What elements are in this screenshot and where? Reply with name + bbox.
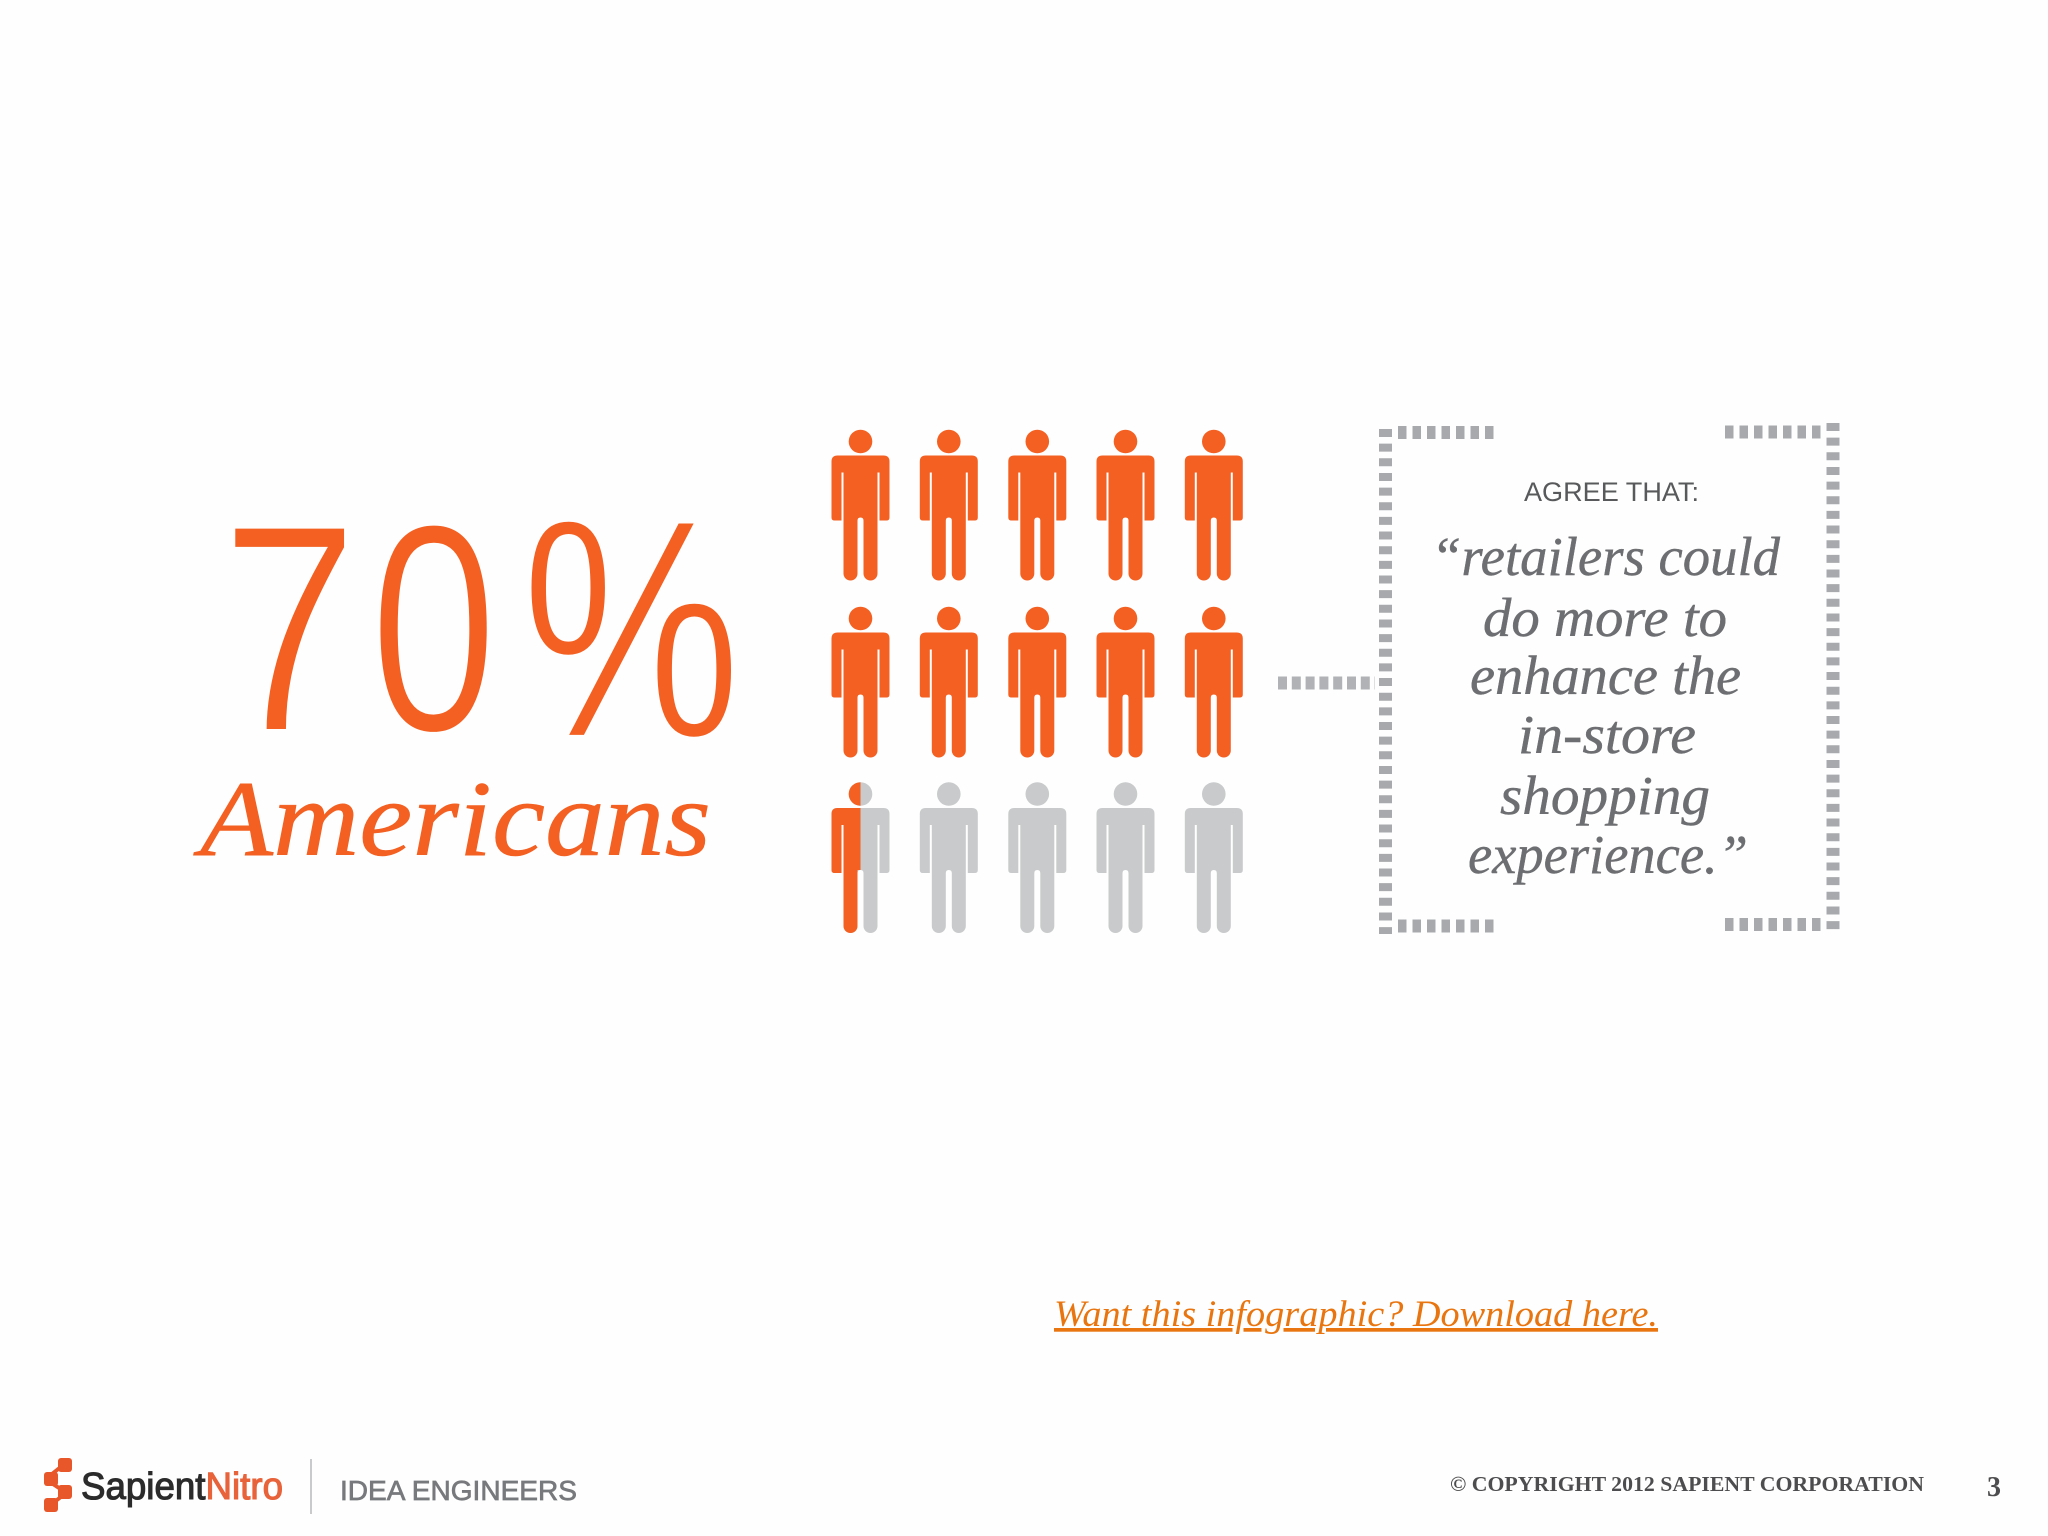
pictogram: 10 in 15 people [832, 430, 1243, 933]
quote text: enhance the [1470, 645, 1741, 706]
logo: SapientNitro [44, 1458, 283, 1512]
quote text: “retailers could [1431, 526, 1780, 587]
row 3: half-filled person and grey people [832, 782, 1243, 933]
dotted connector [1278, 676, 1375, 690]
dotted quote frame [1386, 423, 1833, 934]
quote heading: AGREE THAT: AGREE THAT: [1524, 477, 1699, 507]
page number: 3 [1987, 1472, 2001, 1503]
row 1: orange people [832, 430, 1243, 580]
icon: logo squares [44, 1458, 72, 1512]
quote text: in-store [1518, 704, 1696, 765]
row 2: orange people [832, 607, 1243, 758]
big statistic: 70% [221, 453, 742, 804]
quote text: do more to [1483, 587, 1727, 648]
copyright line: © COPYRIGHT 2012 SAPIENT CORPORATION [1450, 1472, 1924, 1496]
quote text: shopping [1500, 765, 1710, 826]
big statistic: 70%: 7 [221, 462, 358, 794]
logo divider [310, 1459, 312, 1514]
quote text [1431, 526, 1780, 885]
label: Americans: Americans [193, 760, 711, 879]
tagline: IDEA ENGINEERS: IDEA ENGINEERS [340, 1475, 577, 1506]
big statistic: 70%: 0 [370, 463, 497, 795]
download link: Want this infographic? Download here. [1054, 1294, 1658, 1335]
big statistic: 70%: % [521, 453, 742, 804]
logo wordmark: SapientNitro [81, 1466, 283, 1508]
quote text: experience.” [1468, 824, 1748, 885]
